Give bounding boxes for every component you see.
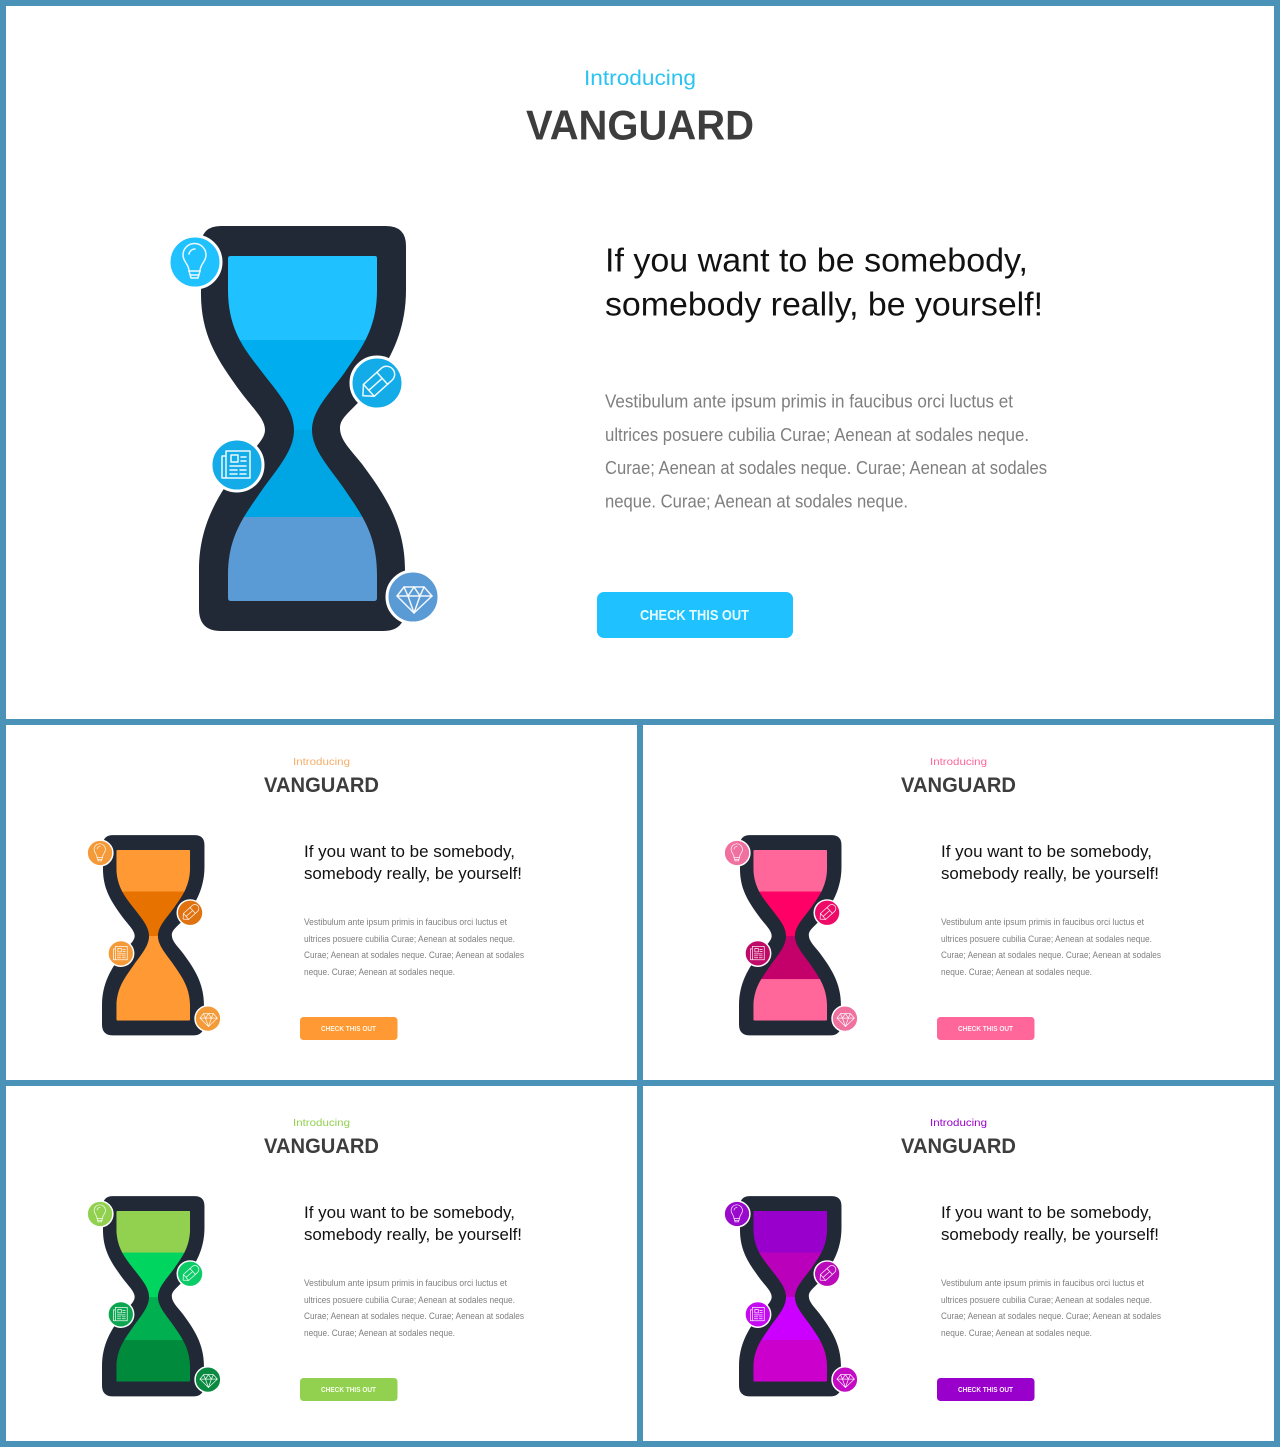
icon: diamond xyxy=(832,1367,858,1392)
headline: If you want to be somebody, xyxy=(304,1204,515,1222)
icon: newspaper xyxy=(108,940,134,966)
label: Introducing: Introducing xyxy=(930,1117,987,1129)
headline: somebody really, be yourself! xyxy=(941,1226,1159,1244)
body text: Vestibulum ante ipsum primis in faucibus orci luctus et xyxy=(304,917,507,927)
icon: diamond xyxy=(195,1367,221,1392)
button: CHECK THIS OUT xyxy=(958,1387,1014,1394)
body text: Curae; Aenean at sodales neque. Curae; Aenean at sodales xyxy=(941,1311,1161,1321)
body text xyxy=(941,917,1161,977)
heading: VANGUARD: VANGUARD xyxy=(901,774,1016,797)
icon: diamond xyxy=(387,571,439,623)
headline xyxy=(304,1204,522,1244)
icon: lightbulb xyxy=(724,1201,750,1227)
headline: somebody really, be yourself! xyxy=(941,865,1159,883)
body text: Curae; Aenean at sodales neque. Curae; Aenean at sodales xyxy=(304,1311,524,1321)
label: Introducing: Introducing xyxy=(930,756,987,768)
button: CHECK THIS OUT xyxy=(321,1387,377,1394)
button xyxy=(597,592,793,638)
body text xyxy=(605,392,1047,512)
hourglass: purple xyxy=(724,1196,858,1396)
button: CHECK THIS OUT xyxy=(958,1026,1014,1033)
button: CHECK THIS OUT xyxy=(640,607,749,624)
headline: somebody really, be yourself! xyxy=(304,1226,522,1244)
body text: Vestibulum ante ipsum primis in faucibus orci luctus et xyxy=(304,1278,507,1288)
heading: VANGUARD: VANGUARD xyxy=(901,1135,1016,1158)
headline: If you want to be somebody, xyxy=(605,242,1028,278)
icon: lightbulb xyxy=(169,236,221,288)
icon: pencil xyxy=(814,900,840,926)
body text xyxy=(304,1278,524,1338)
panel: pink slide xyxy=(643,725,1274,1080)
body text: neque. Curae; Aenean at sodales neque. xyxy=(941,967,1092,977)
body text: Vestibulum ante ipsum primis in faucibus orci luctus et xyxy=(605,392,1013,412)
body text: ultrices posuere cubilia Curae; Aenean at sodales neque. xyxy=(304,1295,515,1305)
heading: VANGUARD: VANGUARD xyxy=(526,102,754,148)
icon: diamond xyxy=(195,1006,221,1031)
headline: somebody really, be yourself! xyxy=(304,865,522,883)
button: CHECK THIS OUT xyxy=(321,1026,377,1033)
body text: Vestibulum ante ipsum primis in faucibus orci luctus et xyxy=(941,917,1144,927)
hourglass: pink xyxy=(724,835,858,1035)
headline xyxy=(941,1204,1159,1244)
headline: If you want to be somebody, xyxy=(304,843,515,861)
icon: lightbulb xyxy=(87,1201,113,1227)
body text: Curae; Aenean at sodales neque. Curae; Aenean at sodales xyxy=(941,950,1161,960)
label: Introducing: Introducing xyxy=(293,756,350,768)
icon: newspaper xyxy=(745,1301,771,1327)
icon: lightbulb xyxy=(87,840,113,866)
headline: If you want to be somebody, xyxy=(941,843,1152,861)
icon: pencil xyxy=(177,900,203,926)
hourglass: blue xyxy=(199,226,406,631)
headline: somebody really, be yourself! xyxy=(605,286,1043,322)
body text: ultrices posuere cubilia Curae; Aenean at sodales neque. xyxy=(605,425,1029,445)
heading: VANGUARD: VANGUARD xyxy=(264,774,379,797)
headline: If you want to be somebody, xyxy=(941,1204,1152,1222)
body text: Vestibulum ante ipsum primis in faucibus orci luctus et xyxy=(941,1278,1144,1288)
icon: newspaper xyxy=(745,940,771,966)
body text xyxy=(941,1278,1161,1338)
headline xyxy=(941,843,1159,883)
panel: orange slide xyxy=(6,725,637,1080)
button xyxy=(937,1017,1034,1040)
label: Introducing: Introducing xyxy=(584,67,696,90)
button xyxy=(300,1017,398,1040)
icon: pencil xyxy=(814,1261,840,1287)
heading: VANGUARD: VANGUARD xyxy=(264,1135,379,1158)
body text: Curae; Aenean at sodales neque. Curae; Aenean at sodales xyxy=(605,458,1047,478)
icon: pencil xyxy=(177,1261,203,1287)
body text: ultrices posuere cubilia Curae; Aenean at sodales neque. xyxy=(941,934,1152,944)
icon: pencil xyxy=(351,357,403,409)
icon: newspaper xyxy=(108,1301,134,1327)
hourglass: orange xyxy=(87,835,221,1035)
icon: diamond xyxy=(832,1006,858,1031)
panel: purple slide xyxy=(643,1086,1274,1441)
icon: newspaper xyxy=(211,439,263,491)
body text: neque. Curae; Aenean at sodales neque. xyxy=(941,1328,1092,1338)
headline xyxy=(605,242,1043,322)
body text: Curae; Aenean at sodales neque. Curae; Aenean at sodales xyxy=(304,950,524,960)
icon: lightbulb xyxy=(724,840,750,866)
button xyxy=(300,1378,398,1401)
body text: neque. Curae; Aenean at sodales neque. xyxy=(304,967,455,977)
hourglass: green xyxy=(87,1196,221,1396)
body text: neque. Curae; Aenean at sodales neque. xyxy=(304,1328,455,1338)
headline xyxy=(304,843,522,883)
panel: green slide xyxy=(6,1086,637,1441)
body text: ultrices posuere cubilia Curae; Aenean at sodales neque. xyxy=(304,934,515,944)
body text: neque. Curae; Aenean at sodales neque. xyxy=(605,492,908,512)
body text: ultrices posuere cubilia Curae; Aenean at sodales neque. xyxy=(941,1295,1152,1305)
panel: main blue slide xyxy=(6,6,1274,719)
button xyxy=(937,1378,1034,1401)
label: Introducing: Introducing xyxy=(293,1117,350,1129)
body text xyxy=(304,917,524,977)
